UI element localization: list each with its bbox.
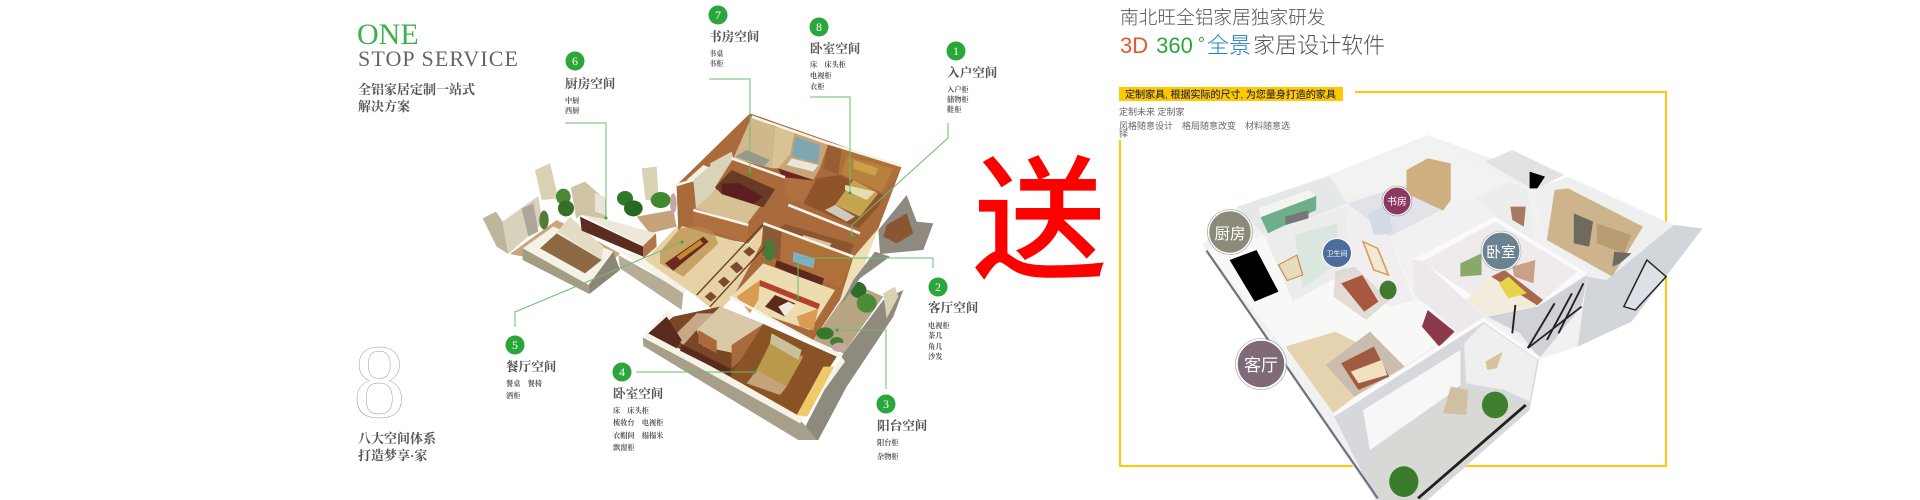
callout: 1 entrance space: 储物柜 (947, 95, 969, 104)
heading: 3D 360 software line: 家居设计软件 (1253, 33, 1385, 58)
callout: 8 master bedroom space: 衣柜 (810, 82, 825, 91)
callout: 7 study space: 7 (715, 8, 721, 22)
kitchen (1237, 177, 1347, 235)
heading: 3D 360 software line: ° (1198, 34, 1205, 54)
room label: bedroom: 卧室 (1486, 244, 1516, 261)
callout: 7 study space: 书房空间 (709, 29, 759, 44)
callout: 1 entrance space: 鞋柜 (947, 105, 962, 114)
text: custom notes: 择 (1119, 128, 1128, 139)
upper block base (677, 113, 902, 340)
callout: 2 living room space: 2 (935, 280, 941, 294)
room label: kitchen (1208, 210, 1252, 254)
big red character: gift: 送 (973, 113, 1107, 307)
central floor (645, 225, 768, 313)
callout: 7 study space: 书柜 (709, 59, 724, 68)
living room (730, 263, 835, 330)
heading: 3D 360 software line: 3D 360 (1120, 33, 1193, 58)
title: STOP SERVICE: STOP SERVICE (358, 46, 518, 71)
room label: living room (1236, 338, 1286, 390)
callout: 3 balcony space: 杂物柜 (877, 452, 899, 461)
callout: 3 balcony space: 阳台空间 (877, 418, 927, 433)
callout: 2 living room space: 沙发 (928, 352, 942, 361)
room label: bathroom (1322, 238, 1352, 268)
dining set (1333, 267, 1397, 320)
panel: eight spaces note (353, 323, 437, 463)
callout: 3 balcony space (836, 328, 927, 461)
living set (1285, 332, 1405, 413)
text: custom notes: 定制未来 定制家 (1119, 106, 1185, 117)
room label: living room: 客厅 (1244, 356, 1278, 375)
room label: bathroom: 卫生间 (1326, 249, 1348, 258)
text: eight space system: 八大空间体系 (358, 431, 437, 446)
callout: 8 master bedroom space: 床 床头柜 (810, 60, 847, 69)
callout: 8 master bedroom space (810, 18, 860, 194)
callout: 4 bedroom space (612, 362, 756, 452)
heading: 3D 360 software line: 全景 (1207, 33, 1251, 58)
room label: bedroom (1481, 231, 1521, 271)
callout: 7 study space: 书桌 (709, 49, 723, 58)
callout: 6 kitchen space: 厨房空间 (565, 76, 615, 91)
left wing (483, 163, 693, 310)
callout: 4 bedroom space: 卧室空间 (613, 386, 663, 401)
balcony and outer walls (798, 195, 933, 440)
main floor (1207, 207, 1466, 413)
bedroom (1412, 217, 1587, 358)
balcony (1333, 320, 1539, 500)
text: one-stop solution: 解决方案 (358, 99, 410, 114)
callout: 1 entrance space (850, 42, 997, 240)
callout: 2 living room space: 客厅空间 (928, 300, 978, 315)
room label: study (1382, 186, 1412, 216)
callout: 1 entrance space: 入户空间 (947, 65, 997, 80)
dining table (660, 225, 718, 277)
right wing with window (1578, 225, 1703, 347)
callout: 6 kitchen space: 中厨 (565, 96, 580, 105)
illustration: right isometric floor plan (1203, 135, 1703, 500)
callout: 8 master bedroom space: 8 (816, 20, 822, 34)
outer shell (1203, 135, 1703, 500)
white wall tops (677, 117, 902, 357)
room label: study: 书房 (1387, 195, 1407, 208)
panel: software heading (1120, 7, 1385, 58)
callout: 6 kitchen space (565, 52, 615, 220)
text: one-stop solution: 全铝家居定制一站式 (358, 82, 475, 97)
callout: 2 living room space: 角几 (928, 342, 942, 351)
callout: 5 dining space: 酒柜 (506, 391, 521, 400)
wardrobe room (1533, 177, 1674, 280)
callout: 4 bedroom space: 床 床头柜 (613, 406, 650, 415)
callout: 5 dining space: 餐厅空间 (506, 359, 556, 374)
callout: 4 bedroom space: 梳妆台 电视柜 (613, 418, 664, 427)
title: ONE: ONE (357, 18, 419, 51)
text: custom notes: 风格随意设计 格局随意改变 材料随意选 (1119, 120, 1290, 131)
callout: 2 living room space: 电视柜 (928, 321, 950, 330)
callout: 2 living room space (796, 258, 978, 361)
wall with sliding door (1230, 206, 1414, 307)
callout: 2 living room space: 茶几 (928, 331, 942, 340)
back rooms (1476, 150, 1564, 240)
lower block (643, 307, 845, 440)
kitchen (556, 167, 677, 258)
corridor diamonds (697, 224, 765, 307)
banner: custom furniture: 定制家具, 根据实际的尺寸, 为您量身打造的家具 (1125, 88, 1336, 101)
callout: 7 study space (708, 6, 759, 176)
callout: 4 bedroom space: 4 (619, 365, 625, 379)
callout: 5 dining space: 餐桌 餐椅 (506, 379, 543, 388)
callout: 6 kitchen space: 6 (572, 54, 578, 68)
yellow frame (1120, 92, 1666, 466)
callout: 8 master bedroom space: 电视柜 (810, 71, 832, 80)
panel: one stop service heading (357, 18, 518, 114)
study room (1330, 137, 1508, 237)
text: eight space system: 打造梦享·家 (358, 448, 427, 463)
callout: 8 master bedroom space: 卧室空间 (810, 41, 860, 56)
callout: 1 entrance space: 1 (953, 44, 959, 58)
room label: kitchen: 厨房 (1214, 225, 1246, 243)
heading: brand line: 南北旺全铝家居独家研发 (1120, 7, 1326, 28)
callout: 6 kitchen space: 西厨 (565, 106, 580, 115)
callout: 4 bedroom space: 飘窗柜 (613, 443, 635, 452)
callout: 1 entrance space: 入户柜 (947, 85, 969, 94)
callout: 5 dining space: 5 (512, 338, 518, 352)
callout: 5 dining space (506, 240, 684, 400)
illustration: left isometric floor plan (483, 113, 933, 440)
upper rooms (677, 117, 902, 300)
big outlined number 8: 8 (353, 323, 406, 440)
callout: 4 bedroom space: 衣帽间 榻榻米 (613, 431, 664, 440)
callout: 3 balcony space: 阳台柜 (877, 438, 899, 447)
callout: 3 balcony space: 3 (883, 397, 889, 411)
